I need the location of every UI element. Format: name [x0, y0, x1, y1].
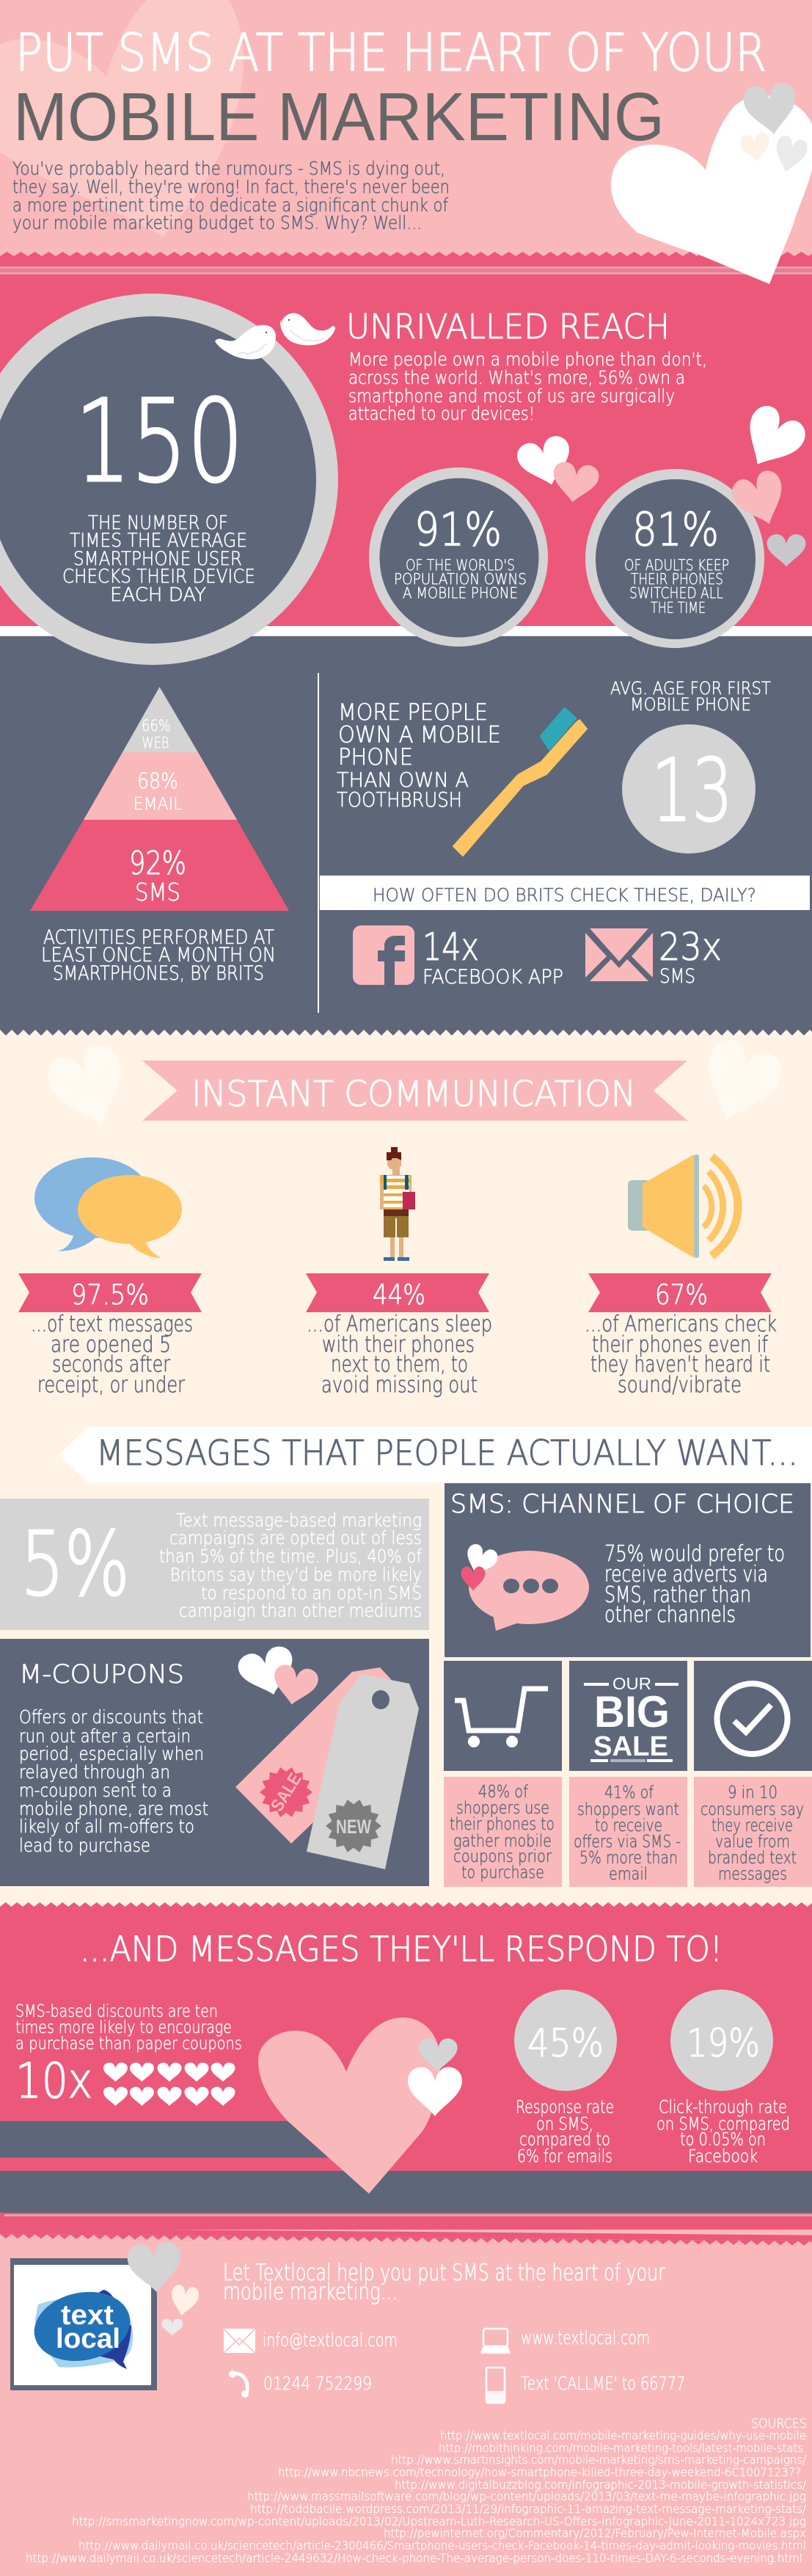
- text: intro: your mobile marketing budget to SMS. Why? Well...: [12, 212, 422, 233]
- contact: email: info@textlocal.com: [263, 2329, 398, 2351]
- icon box: big sale: BIG: [594, 1687, 670, 1736]
- panel: messages they'll respond to: [0, 1902, 812, 2246]
- stat circle: 91%: POPULATION OWNS: [394, 570, 527, 588]
- stat box: 41% of shoppers: 5% more than: [579, 1849, 678, 1868]
- stat: facebook 14x: [423, 925, 563, 989]
- stat: 44%: [306, 1273, 492, 1398]
- panel: unrivalled reach background: [0, 252, 812, 636]
- text: reach intro: attached to our devices!: [348, 403, 535, 424]
- stat circle: 81%: OF ADULTS KEEP: [624, 556, 729, 574]
- panel: header: [0, 0, 812, 284]
- text: toothbrush fact: [337, 699, 501, 812]
- stat box: 9 in 10 consumers: [694, 1777, 812, 1887]
- stat box: 41% of shoppers: email: [609, 1865, 648, 1884]
- banner: how often do brits check: [320, 876, 810, 910]
- stat: 44%: avoid missing out: [321, 1372, 478, 1398]
- stat circle: 19%: [656, 1990, 790, 2166]
- stat box: 48% of shoppers: to purchase: [461, 1863, 544, 1882]
- stat box: 48% of shoppers: shoppers use: [456, 1799, 549, 1818]
- text: average age heading: MOBILE PHONE: [630, 694, 751, 715]
- text: reach intro: [348, 349, 707, 424]
- hearts: footer cluster: [126, 2241, 200, 2335]
- panel: header background: [0, 0, 812, 256]
- panel: 5% opt out: to respond to an opt-in SMS: [201, 1582, 422, 1604]
- icon: speech bubbles: [34, 1157, 182, 1258]
- stat box: 48% of shoppers: gather mobile: [453, 1832, 552, 1851]
- stat circle: 45%: on SMS,: [536, 2114, 593, 2134]
- title: [13, 23, 767, 155]
- contact: text message: Text 'CALLME' to 66777: [521, 2373, 685, 2394]
- icon box: big sale: OUR: [612, 1674, 651, 1693]
- chart: activities pyramid: 68%: [137, 768, 178, 793]
- panel: footer background: [0, 2224, 812, 2576]
- panel: 5% opt out: Text message-based marketing: [176, 1510, 422, 1531]
- stat circle: 150: THE NUMBER OF: [88, 512, 228, 534]
- stat: sms 23x: [659, 925, 722, 988]
- stat circle: 45%: compared to: [519, 2129, 610, 2150]
- panel: instant communication and messages: [0, 1030, 812, 1907]
- stat circle: 150: [0, 294, 338, 665]
- text: pyramid caption: ACTIVITIES PERFORMED AT: [43, 926, 274, 949]
- panel: 5% opt out: [0, 1499, 429, 1630]
- contact: phone: [229, 2371, 372, 2398]
- icon: ten hearts: [103, 2062, 235, 2106]
- stat: 67%: sound/vibrate: [618, 1372, 742, 1398]
- stat circle: 13: 13: [651, 740, 733, 841]
- icon: coupon tags: NEW: [336, 1816, 371, 1838]
- text: intro: [12, 158, 450, 233]
- stat box: 48% of shoppers: [444, 1777, 562, 1887]
- text: call to action: [223, 2260, 665, 2305]
- heading: unrivalled reach: UNRIVALLED REACH: [346, 307, 670, 346]
- text: toothbrush fact: THAN OWN A: [337, 768, 469, 792]
- stat box: 41% of shoppers: 41% of: [604, 1783, 654, 1802]
- stat circle: 81%: SWITCHED ALL: [629, 584, 723, 602]
- panel: m-coupons: [0, 1639, 429, 1886]
- panel: unrivalled reach content: [0, 294, 811, 665]
- icon: facebook: [353, 925, 414, 985]
- stat: 67%: 67%: [655, 1279, 708, 1311]
- stat box: 48% of shoppers: their phones to: [450, 1815, 555, 1834]
- stat box: 41% of shoppers: shoppers want: [577, 1800, 679, 1819]
- icon: envelope: [585, 928, 653, 981]
- text: reach intro: smartphone and most of us are surgically: [348, 385, 675, 407]
- panel: 5% opt out: campaign than other mediums: [179, 1600, 422, 1621]
- stat circle: 91%: 91%: [414, 503, 502, 556]
- text: toothbrush fact: TOOTHBRUSH: [337, 787, 462, 812]
- stat circle: 150: EACH DAY: [110, 584, 206, 606]
- decoration: pale background heart: [0, 0, 244, 237]
- stat: 10x: 10x: [15, 2053, 92, 2109]
- stat: 97.5%: [18, 1273, 202, 1398]
- text: average age heading: [610, 678, 771, 715]
- banner: instant communication: INSTANT COMMUNICATION: [191, 1074, 636, 1115]
- panel: m-coupons: mobile phone, are most: [19, 1798, 208, 1819]
- stat: 67%: their phones even if: [592, 1332, 768, 1358]
- stat circle: 45%: 6% for emails: [517, 2146, 612, 2166]
- stat box: 41% of shoppers: offers via SMS -: [574, 1833, 681, 1852]
- stat circle: 91%: OF THE WORLD'S: [406, 556, 515, 574]
- hearts: header cluster: [611, 81, 812, 284]
- stat box: 41% of shoppers: to receive: [595, 1816, 662, 1835]
- stat circle: 150: CHECKS THEIR DEVICE: [62, 566, 255, 588]
- text: intro: You've probably heard the rumours - SMS is dying out,: [12, 158, 445, 179]
- title: MOBILE MARKETING: [13, 79, 665, 155]
- contact: phone: 01244 752299: [263, 2373, 372, 2394]
- hearts: big heart cluster: [258, 2017, 462, 2194]
- icon box: check mark: [694, 1661, 812, 1771]
- text: toothbrush fact: PHONE: [338, 744, 413, 771]
- stat circle: 81%: 81%: [632, 503, 719, 556]
- panel: m-coupons: lead to purchase: [19, 1835, 150, 1856]
- text: average age heading: AVG. AGE FOR FIRST: [610, 678, 771, 699]
- chart: activities pyramid: [30, 687, 289, 911]
- stat box: 41% of shoppers: [569, 1777, 687, 1887]
- stat circle: 150: SMARTPHONE USER: [73, 548, 242, 570]
- stat: 44%: next to them, to: [331, 1352, 468, 1378]
- stat: 97.5%: seconds after: [52, 1352, 171, 1378]
- banner: messages that people actually want: [59, 1427, 812, 1482]
- stat: facebook 14x: FACEBOOK APP: [423, 966, 563, 989]
- stat circle: 19%: 19%: [687, 2021, 760, 2066]
- contact: text message: [486, 2368, 685, 2403]
- text: pyramid caption: LEAST ONCE A MONTH ON: [41, 944, 276, 967]
- banner: instant communication: [142, 1060, 687, 1121]
- text: pyramid caption: [41, 926, 276, 985]
- contact: website: www.textlocal.com: [521, 2327, 650, 2348]
- stat circle: 91%: [369, 467, 548, 647]
- panel: m-coupons: M-COUPONS: [19, 1660, 184, 1689]
- panel: m-coupons: m-coupon sent to a: [19, 1780, 172, 1801]
- stat circle: 45%: [514, 1990, 617, 2166]
- icon: coupon tags: [235, 1667, 419, 1869]
- panel: m-coupons: period, especially when: [19, 1743, 204, 1764]
- stat box: 9 in 10 consumers: value from: [715, 1833, 790, 1852]
- logo: textlocal: local: [56, 2324, 120, 2354]
- text: coupon comparison: a purchase than paper coupons: [15, 2034, 242, 2053]
- stat box: 48% of shoppers: coupons prior: [453, 1847, 552, 1866]
- stat circle: 45%: Response rate: [516, 2097, 614, 2117]
- panel: m-coupons: Offers or discounts that: [19, 1706, 203, 1728]
- stat circle: 19%: Facebook: [688, 2146, 758, 2166]
- icon box: shopping cart: [444, 1661, 562, 1771]
- stat: 44%: ...of Americans sleep: [307, 1311, 492, 1337]
- stat: facebook 14x: 14x: [423, 925, 479, 969]
- text: coupon comparison: SMS-based discounts are ten: [15, 2002, 218, 2021]
- panel: sms channel of choice: other channels: [604, 1602, 736, 1628]
- stat: 97.5%: are opened 5: [51, 1332, 171, 1358]
- stat circle: 19%: to 0.05% on: [680, 2129, 766, 2150]
- panel: m-coupons: likely of all m-offers to: [19, 1816, 194, 1837]
- text: sources: [26, 2416, 807, 2565]
- chart: activities pyramid: SMS: [135, 878, 180, 906]
- icon: coupon tags: SALE: [267, 1769, 306, 1815]
- icon: bird on ring: [215, 325, 276, 360]
- text: intro: a more pertinent time to dedicate a significant chunk of: [12, 194, 448, 216]
- stat: 44%: 44%: [373, 1279, 425, 1311]
- panel: m-coupons: relayed through an: [19, 1761, 170, 1783]
- text: coupon comparison: times more likely to encourage: [15, 2018, 232, 2037]
- icon: toothbrush: [453, 709, 587, 856]
- panel: 5% opt out: Britons say they'd be more likely: [170, 1564, 422, 1585]
- stat: 44%: with their phones: [322, 1332, 475, 1358]
- text: toothbrush fact: OWN A MOBILE: [338, 722, 501, 749]
- icon: person: [380, 1147, 415, 1261]
- stat: sms 23x: 23x: [659, 925, 722, 969]
- chart: activities pyramid: WEB: [142, 734, 169, 752]
- text: intro: they say. Well, they're wrong! In fact, there's never been: [12, 176, 450, 197]
- panel: 5% opt out: 5%: [21, 1514, 130, 1616]
- stat box: 48% of shoppers: 48% of: [478, 1783, 529, 1802]
- stat circle: 81%: THEIR PHONES: [631, 570, 723, 588]
- stat: 97.5%: ...of text messages: [31, 1311, 193, 1337]
- text: call to action: Let Textlocal help you put SMS at the heart of your: [223, 2260, 665, 2286]
- hearts: cream pair: [43, 1035, 787, 1136]
- chart: activities pyramid: 66%: [142, 717, 171, 735]
- stat circle: 13: [622, 724, 756, 854]
- stat box: 9 in 10 consumers: 9 in 10: [728, 1783, 778, 1802]
- stat circle: 150: TIMES THE AVERAGE: [70, 530, 247, 552]
- stat: sms 23x: SMS: [659, 965, 695, 988]
- panel: sms channel of choice: SMS, rather than: [604, 1582, 751, 1608]
- icon: bird flying: [279, 313, 335, 345]
- text: reach intro: More people own a mobile phone than don't,: [348, 349, 707, 370]
- stat: 97.5%: 97.5%: [71, 1279, 149, 1311]
- contact: email: [224, 2329, 398, 2353]
- panel: sms channel of choice: [445, 1483, 811, 1657]
- panel: footer: [10, 2241, 807, 2565]
- hearts: coupon pair: [235, 1643, 320, 1709]
- icon box: big sale: SALE: [593, 1731, 668, 1762]
- icon: speaker: [628, 1154, 738, 1258]
- heading: ...AND MESSAGES THEY'LL RESPOND TO!: [80, 1929, 723, 1970]
- stat circle: 81%: THE TIME: [651, 599, 706, 616]
- stat: 97.5%: receipt, or under: [37, 1372, 186, 1398]
- logo: textlocal: text: [61, 2300, 114, 2331]
- panel: m-coupons: run out after a certain: [19, 1725, 191, 1747]
- stat circle: 150: 150: [75, 375, 244, 508]
- logo: textlocal: [10, 2258, 157, 2390]
- contact: website: [480, 2327, 650, 2354]
- banner: how often do brits check: HOW OFTEN DO BRITS CHECK THESE, DAILY?: [373, 884, 756, 906]
- panel: 5% opt out: than 5% of the time. Plus, 40% of: [159, 1546, 422, 1567]
- stat: 67%: [585, 1273, 777, 1398]
- text: reach intro: across the world. What's more, 56% own a: [348, 367, 685, 388]
- chart: activities pyramid: EMAIL: [133, 795, 183, 814]
- text: call to action: mobile marketing...: [223, 2279, 398, 2305]
- panel: smartphone stats: [0, 636, 812, 1030]
- icon box: big sale: [569, 1661, 687, 1771]
- stat box: 9 in 10 consumers: messages: [718, 1865, 787, 1884]
- stat circle: 45%: 45%: [527, 2021, 604, 2066]
- hearts: reach cluster: [514, 401, 811, 567]
- chart: activities pyramid: 92%: [129, 845, 186, 882]
- text: pyramid caption: SMARTPHONES, BY BRITS: [53, 962, 264, 985]
- text: toothbrush fact: MORE PEOPLE: [338, 699, 488, 726]
- icon: chat bubble with hearts: [461, 1542, 589, 1631]
- panel: sms channel of choice: receive adverts via: [604, 1562, 768, 1587]
- panel: 5% opt out: campaigns are opted out of less: [169, 1527, 422, 1549]
- text: coupon comparison: [15, 2002, 242, 2053]
- panel: sms channel of choice: SMS: CHANNEL OF CHOICE: [450, 1490, 794, 1519]
- stat circle: 91%: A MOBILE PHONE: [403, 584, 518, 602]
- icon: pink heart over circle: [728, 467, 793, 533]
- stat circle: 81%: [585, 469, 764, 648]
